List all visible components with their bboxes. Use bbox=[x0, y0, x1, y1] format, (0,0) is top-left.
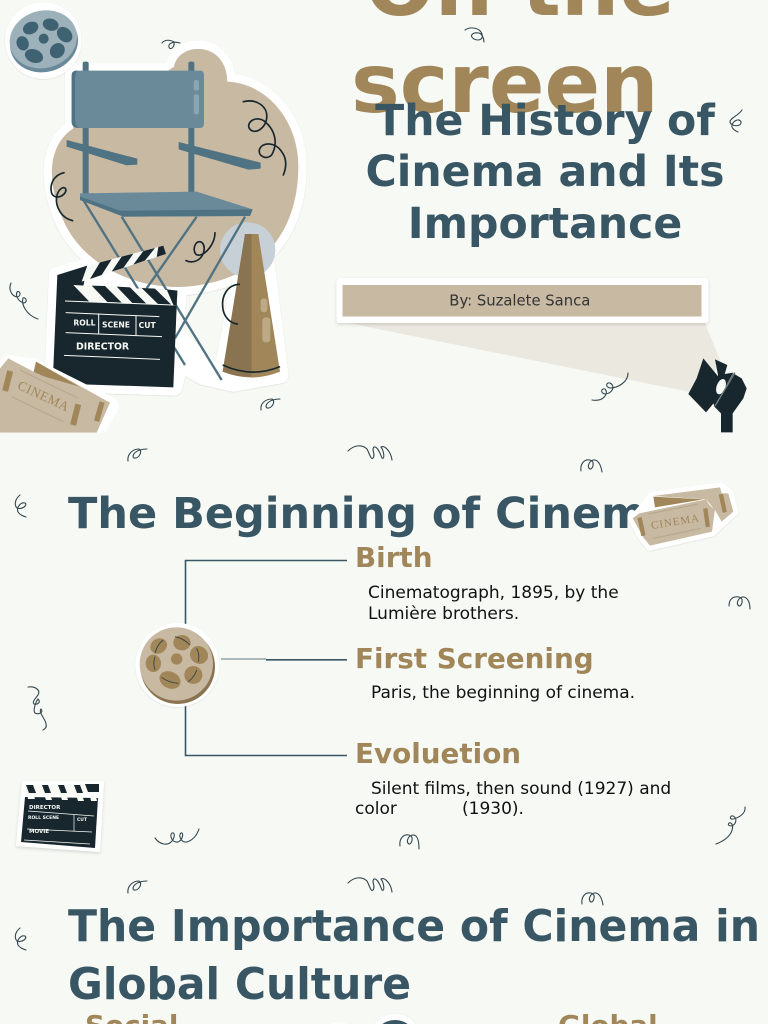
illustration: director's chair sticker bbox=[0, 2, 298, 437]
connector lines bbox=[186, 560, 347, 756]
subtitle: The History of Cinema and Its Importance: The History of bbox=[375, 96, 715, 146]
subtitle: The History of Cinema and Its Importance bbox=[366, 96, 724, 249]
ticket: CINEMA bbox=[15, 377, 72, 414]
item: Evoluetion bbox=[355, 737, 671, 819]
item: Birth bbox=[355, 541, 619, 624]
chair bbox=[67, 62, 261, 380]
heading: The Importance of Cinema in Global Culture: Global Culture bbox=[68, 959, 411, 1010]
item: Evoluetion: color bbox=[355, 799, 397, 819]
icon: small clapperboard sticker: CUT bbox=[77, 817, 88, 823]
icon: small clapperboard sticker: DIRECTOR bbox=[29, 805, 61, 811]
icon: spotlight bbox=[688, 358, 747, 432]
item: First Screening: Paris, the beginning of cinema. bbox=[371, 683, 635, 703]
cropped icon: dark circle bbox=[321, 1014, 421, 1024]
item: First Screening bbox=[355, 642, 635, 703]
clapperboard: CUT bbox=[139, 321, 157, 330]
beige blob bbox=[52, 49, 298, 287]
author box bbox=[336, 278, 708, 323]
ticket bbox=[0, 358, 115, 437]
spotlight beam bbox=[348, 323, 722, 392]
item: Evoluetion: (1930). bbox=[462, 799, 524, 819]
icon: small clapperboard sticker: ROLL SCENE bbox=[28, 815, 59, 821]
film reel: blue bbox=[3, 2, 85, 80]
icon: cinema ticket sticker bbox=[633, 487, 733, 546]
cropped labels: Social and Global bbox=[85, 1009, 658, 1024]
icon: small clapperboard sticker: MOVIE bbox=[29, 829, 49, 835]
title: On the screen: screen bbox=[351, 37, 658, 132]
item: Evoluetion: Silent films, then sound (1927) and bbox=[371, 779, 671, 799]
megaphone bbox=[223, 234, 280, 377]
clapperboard bbox=[53, 246, 177, 387]
sticker backing bbox=[52, 49, 298, 387]
squiggles on blob bbox=[51, 101, 286, 324]
clapperboard: SCENE bbox=[102, 320, 130, 329]
icon: beige film reel bbox=[135, 623, 219, 707]
title: On the screen bbox=[351, 0, 675, 132]
item: Birth: Cinematograph, 1895, by the bbox=[368, 583, 619, 603]
clapperboard: DIRECTOR bbox=[76, 341, 129, 352]
subtitle: The History of Cinema and Its Importance: Importance bbox=[408, 199, 682, 249]
pale circle bbox=[220, 222, 275, 278]
item: First Screening: First Screening bbox=[355, 642, 594, 675]
subtitle: The History of Cinema and Its Importance: Cinema and Its bbox=[366, 147, 724, 197]
heading: The Beginning of Cinema: The Beginning of Cinema bbox=[68, 489, 675, 539]
clapperboard: ROLL bbox=[73, 319, 96, 328]
icon: small clapperboard sticker bbox=[16, 781, 104, 852]
icon: cinema ticket sticker: CINEMA bbox=[650, 513, 700, 532]
item: Birth: Lumière brothers. bbox=[368, 604, 519, 624]
heading: The Importance of Cinema in Global Culture bbox=[68, 901, 760, 1010]
heading: The Importance of Cinema in Global Culture: The Importance of Cinema in bbox=[68, 901, 760, 952]
author box: By: Suzalete Sanca bbox=[449, 292, 590, 310]
item: Evoluetion: Evoluetion bbox=[355, 737, 521, 770]
item: Birth: Birth bbox=[355, 541, 433, 574]
